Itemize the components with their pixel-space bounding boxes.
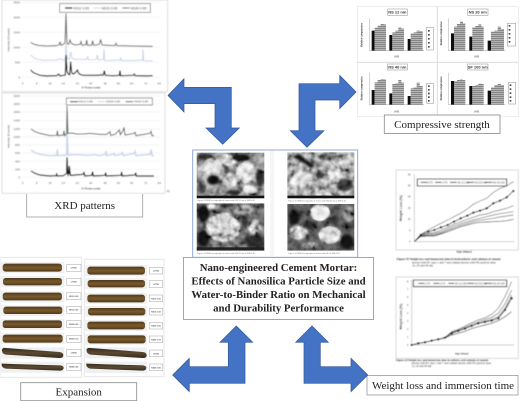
title box: Nano-engineered Cement Mortar: <box>200 262 357 274</box>
panel: expansion specimen photographs: NS20 0.65 <box>69 324 79 326</box>
XRD chart a: Intensity [Counts] <box>6 28 10 52</box>
XRD chart a <box>2 0 168 92</box>
panel: SEM micrographs: Figure 13 SEM micrographs of mortar with NS 12 nm at W/B 0.65 <box>197 199 256 202</box>
label: XRD patterns <box>27 194 143 217</box>
XRD chart b: 600 <box>15 151 20 155</box>
XRD chart b: NS40 0.85 <box>134 100 148 104</box>
XRD chart a: 84 <box>158 81 161 85</box>
chart: weight loss in hydrochloric acid: Weight Loss (%) <box>399 195 403 221</box>
chart: weight loss in hydrochloric acid: 15 <box>408 206 411 210</box>
chart: weight loss in sulfuric acid: 12, 20 and 40 nm <box>412 364 432 368</box>
chart: weight loss in hydrochloric acid: 10 <box>408 217 411 221</box>
panel: expansion specimen photographs: LT75N <box>153 271 160 273</box>
chart: weight loss in sulfuric acid: 1 <box>407 335 409 339</box>
panel: SEM micrographs: Figure 16 SEM micrographs of mortar with SF at W/B 0.85 <box>288 252 341 255</box>
label: Weight loss and immersion time: Weight loss and immersion time <box>372 380 514 392</box>
XRD chart b: 56 <box>117 181 120 185</box>
panel: expansion specimen photographs <box>0 257 164 377</box>
XRD chart a: NS12 0.65 <box>73 6 89 10</box>
title box <box>184 258 374 320</box>
XRD chart b: 800 <box>15 143 20 147</box>
chart: weight loss in sulfuric acid: 6 <box>407 295 409 299</box>
XRD chart a: 1500 <box>13 30 20 34</box>
chart: weight loss in hydrochloric acid: 25 <box>408 184 411 188</box>
XRD chart a: 0 <box>18 75 20 79</box>
chart: weight loss in sulfuric acid <box>396 277 518 368</box>
XRD chart b: 400 <box>15 159 20 163</box>
arrow: bottom left, from title to expansion <box>173 326 253 392</box>
XRD chart b: 1200 <box>13 127 20 131</box>
XRD chart b: 0 <box>22 181 24 185</box>
panel: SEM micrographs <box>193 150 358 257</box>
label: Expansion: Expansion <box>55 386 102 398</box>
XRD chart b: NS12 0.85 <box>79 100 93 104</box>
XRD chart b: NS20 0.85 <box>106 100 120 104</box>
panel: SEM micrographs: Figure 14 SEM micrographs of mortar with NS 20 nm at W/B 0.65 <box>197 252 256 255</box>
XRD chart b: 0 <box>18 175 20 179</box>
chart: weight loss in hydrochloric acid: NS 12 0.65 <box>457 182 470 184</box>
chart: weight loss in sulfuric acid: NS 12 0.85 <box>455 283 467 285</box>
XRD chart a: NS20 0.65 <box>102 6 118 10</box>
chart: SF 100 nm: Relative compressive <box>440 76 443 100</box>
chart: SF 100 nm: W/B <box>474 110 479 114</box>
panel: expansion specimen photographs: NS20 0.75 <box>69 339 79 341</box>
label: Weight loss and immersion time <box>367 376 518 395</box>
SEM image: top right <box>287 152 354 198</box>
XRD chart a: 2500 <box>13 0 20 4</box>
chart: weight loss in sulfuric acid: 5 <box>407 303 409 307</box>
panel: expansion specimen photographs: NS12 0.65 <box>69 296 79 298</box>
chart: NS 20 nm: W/B <box>474 54 479 58</box>
XRD chart a: 2000 <box>13 15 20 19</box>
XRD chart a: 64 <box>130 81 134 85</box>
panel: XRD patterns <box>2 0 170 193</box>
chart: weight loss in sulfuric acid: 7 <box>407 287 409 291</box>
chart: weight loss in hydrochloric acid: NS 40 0.65 <box>493 182 505 184</box>
XRD chart a: 24 <box>62 81 65 85</box>
arrow: top left, from XRD to SEM <box>168 79 239 144</box>
XRD chart a: 56 <box>117 81 120 85</box>
panel: expansion specimen photographs: NS20 0.75 <box>151 339 162 341</box>
XRD chart b: 48 <box>103 181 107 185</box>
label: Compressive strength <box>384 115 500 134</box>
chart: weight loss in hydrochloric acid: 30 <box>408 173 411 177</box>
chart: weight loss in sulfuric acid: 8 <box>407 280 409 284</box>
arrow: bottom right, from title to weight loss <box>296 326 368 392</box>
panel: expansion specimen photographs: LT75N <box>71 268 77 270</box>
XRD chart b: 8 <box>36 181 38 185</box>
panel: compressive strength bar charts <box>357 7 518 117</box>
title box: Effects of Nanosilica Particle Size and <box>191 276 366 288</box>
chart: weight loss in sulfuric acid: Figure 20 Weight loss and immersion time in sulfuric acid solution of cement <box>396 358 488 362</box>
chart: SF 100 nm: SF 100 nm <box>468 64 488 69</box>
chart: weight loss in sulfuric acid: NS 20 0.85 <box>475 283 487 285</box>
chart: NS 40 nm <box>361 64 433 114</box>
XRD chart b: 32 <box>76 181 79 185</box>
panel: SEM micrographs: Figure 15 SEM micrographs of mortar with NS 40 nm at W/B 0.65 <box>288 199 347 202</box>
XRD chart a: 0 <box>22 81 24 85</box>
XRD chart b <box>2 93 170 193</box>
XRD chart b: 40 <box>89 181 93 185</box>
label: Compressive strength: Compressive strength <box>394 119 490 131</box>
panel: expansion specimen photographs: NS12 0.65 <box>151 298 162 300</box>
chart: NS 12 nm: W/B <box>394 54 399 58</box>
chart: weight loss in hydrochloric acid: NS 20 0.65 <box>475 182 487 184</box>
panel: expansion specimen photographs: NS12 0.65 <box>69 310 79 312</box>
XRD chart b: 2000 <box>13 94 20 98</box>
chart: NS 20 nm: NS 20 nm <box>469 10 487 15</box>
XRD chart b: 1000 <box>13 135 20 139</box>
chart: weight loss in sulfuric acid: LT75 <box>440 283 446 285</box>
chart: weight loss in sulfuric acid: 4 <box>407 311 409 315</box>
chart: weight loss in hydrochloric acid: LT75 <box>442 182 448 184</box>
XRD chart b: 1400 <box>13 119 20 123</box>
chart: weight loss in sulfuric acid: 3 <box>407 319 409 323</box>
panel: expansion specimen photographs: LT75N <box>71 282 77 284</box>
XRD chart b: 1600 <box>13 110 20 114</box>
XRD chart b: b) <box>167 189 170 193</box>
chart: NS 20 nm <box>440 9 516 58</box>
chart: weight loss in sulfuric acid: 2 <box>407 327 409 331</box>
chart: weight loss in hydrochloric acid <box>396 170 518 269</box>
panel: weight loss charts <box>396 170 518 368</box>
chart: weight loss in hydrochloric acid: 0 <box>409 240 411 244</box>
XRD chart b: 1800 <box>13 102 20 106</box>
chart: weight loss in hydrochloric acid: Age (days) <box>456 250 472 254</box>
chart: NS 12 nm: Relative compressive <box>361 22 364 47</box>
panel: expansion specimen photographs: NS12 0.65 <box>151 312 162 314</box>
chart: weight loss in sulfuric acid: LT75 <box>425 283 431 285</box>
XRD chart b: 72 <box>144 181 148 185</box>
panel: expansion specimen photographs: NS40 0.85 <box>69 366 79 369</box>
panel: expansion specimen photographs: NS20 0.65 <box>151 326 162 328</box>
SEM image: bottom right <box>287 204 354 251</box>
XRD chart a: 8 <box>36 81 38 85</box>
XRD chart b: 16 <box>48 181 52 185</box>
SEM image: bottom left <box>197 203 264 251</box>
XRD chart b: Intensity [Counts] <box>6 125 10 148</box>
chart: weight loss in sulfuric acid: Age (days) <box>455 352 469 356</box>
chart: weight loss in sulfuric acid: Weight Loss (%) <box>399 304 403 330</box>
SEM image: top left <box>197 153 264 198</box>
panel: expansion specimen photographs: NS40 0.85 <box>151 366 162 369</box>
XRD chart b: 2-Theta-scale <box>81 187 101 191</box>
XRD chart b: 84 <box>158 181 161 185</box>
chart: weight loss in sulfuric acid: mortar with PC type 1 and 7 and cement mortar with NS particle sizes <box>412 361 491 365</box>
XRD chart a: 40 <box>89 81 93 85</box>
chart: NS 20 nm: Relative compressive <box>440 21 443 45</box>
chart: weight loss in hydrochloric acid: Figure 19 Weight loss and immersion time in hydrochloric acid solution of cement <box>397 257 501 261</box>
chart: weight loss in hydrochloric acid: 5 <box>409 228 411 232</box>
title box: Water-to-Binder Ratio on Mechanical <box>191 289 366 301</box>
label: XRD patterns: XRD patterns <box>54 200 115 212</box>
chart: weight loss in hydrochloric acid: 12, 20 and 40 nm <box>412 264 433 269</box>
XRD chart b: 64 <box>130 181 134 185</box>
XRD chart a: 32 <box>76 81 79 85</box>
XRD chart a: 16 <box>48 81 52 85</box>
label: Expansion <box>21 383 137 401</box>
chart: weight loss in sulfuric acid: 0 <box>407 343 409 347</box>
XRD chart a: 1000 <box>13 45 20 49</box>
XRD chart b: 200 <box>15 167 20 171</box>
XRD chart a: 72 <box>144 81 148 85</box>
XRD chart a: 500 <box>15 60 20 64</box>
chart: NS 12 nm <box>361 9 433 58</box>
chart: weight loss in sulfuric acid: NS 40 0.85 <box>493 283 505 285</box>
panel: expansion specimen photographs: LT50N <box>71 353 77 355</box>
XRD chart b: 24 <box>62 181 65 185</box>
panel: expansion specimen photographs: LT50N <box>153 353 160 355</box>
chart: NS 40 nm: NS 40 nm <box>388 64 407 69</box>
arrow: top right, from compressive strength to SEM <box>290 75 356 147</box>
chart: NS 40 nm: W/B <box>394 110 399 114</box>
XRD chart a: 2-Theta-scale <box>81 85 101 89</box>
chart: weight loss in hydrochloric acid: LT75 <box>428 182 434 184</box>
panel: expansion specimen photographs: LT75N <box>153 284 160 286</box>
XRD chart a: NS40 0.65 <box>131 6 147 10</box>
chart: weight loss in hydrochloric acid: mortar with PC type 1 and 7 and cement mortar with NS particle sizes <box>412 260 497 264</box>
chart: SF 100 nm <box>440 64 516 114</box>
chart: NS 12 nm: NS 12 nm <box>388 10 407 15</box>
XRD chart a: 48 <box>103 81 107 85</box>
chart: NS 40 nm: Relative compressive <box>361 76 364 100</box>
chart: weight loss in hydrochloric acid: 20 <box>408 195 411 199</box>
title box: and Durability Performance <box>213 302 344 314</box>
